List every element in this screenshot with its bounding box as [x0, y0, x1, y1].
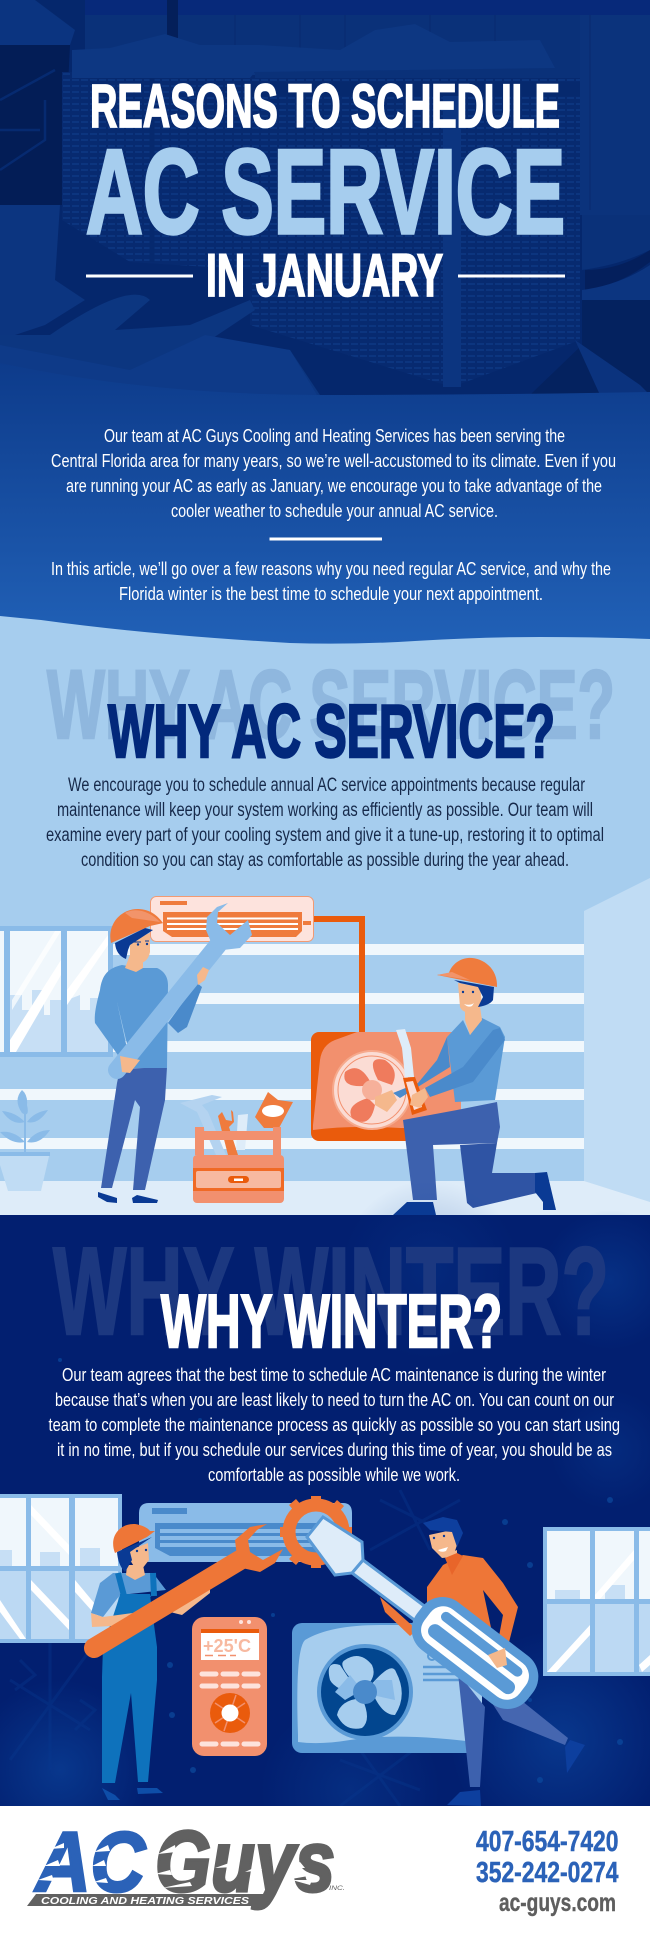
panel: why winter — [0, 1180, 650, 1880]
phone numbers — [476, 1826, 618, 1889]
kneeling worker with screwdriver — [375, 958, 556, 1215]
panel: intro — [0, 363, 650, 644]
white band — [0, 1806, 650, 1941]
wall stripes and floor — [0, 878, 650, 1215]
panel: hero photo with title — [0, 0, 650, 400]
panel: why ac service — [0, 600, 650, 1215]
thermostat remote: +25'C — [203, 1636, 251, 1656]
left window — [0, 1494, 122, 1643]
worker in overalls with wrench — [91, 1524, 283, 1800]
company logo: INC. — [329, 1885, 345, 1892]
right window — [543, 1527, 650, 1676]
website: ac-guys.com — [499, 1889, 616, 1917]
indoor AC unit — [139, 1503, 352, 1562]
outdoor AC unit with fan — [292, 1623, 482, 1753]
blue wave background — [0, 363, 650, 644]
body text — [46, 775, 604, 871]
company logo: AC — [34, 1815, 146, 1909]
intro closing paragraph: Florida winter is the best time to schedule your next appointment. — [119, 584, 543, 604]
divider — [270, 538, 382, 540]
company logo: Guys — [155, 1814, 335, 1910]
window with city view — [0, 926, 113, 1057]
company logo: COOLING AND HEATING SERVICES — [41, 1895, 249, 1907]
snowy AC units photo — [0, 0, 650, 400]
company logo — [27, 1814, 345, 1910]
outdoor AC unit with fan — [311, 1032, 461, 1141]
plant in pot — [0, 1090, 50, 1191]
thermostat remote — [192, 1617, 267, 1756]
orange gear — [280, 1496, 352, 1568]
navy snowy background — [0, 1180, 650, 1880]
toolbox — [180, 1092, 293, 1203]
intro paragraph — [51, 426, 616, 521]
title line 3 with rules: IN JANUARY — [206, 242, 443, 309]
worker with wrench — [95, 903, 252, 1203]
worker with giant screwdriver — [307, 1517, 585, 1806]
light blue background — [0, 600, 650, 1215]
body text — [48, 1364, 620, 1485]
panel: footer — [0, 1806, 650, 1941]
indoor AC unit with pipe — [150, 896, 362, 1034]
intro closing paragraph — [51, 559, 611, 604]
intro paragraph: cooler weather to schedule your annual AC service. — [171, 501, 498, 521]
body text: comfortable as possible while we work. — [208, 1464, 460, 1485]
